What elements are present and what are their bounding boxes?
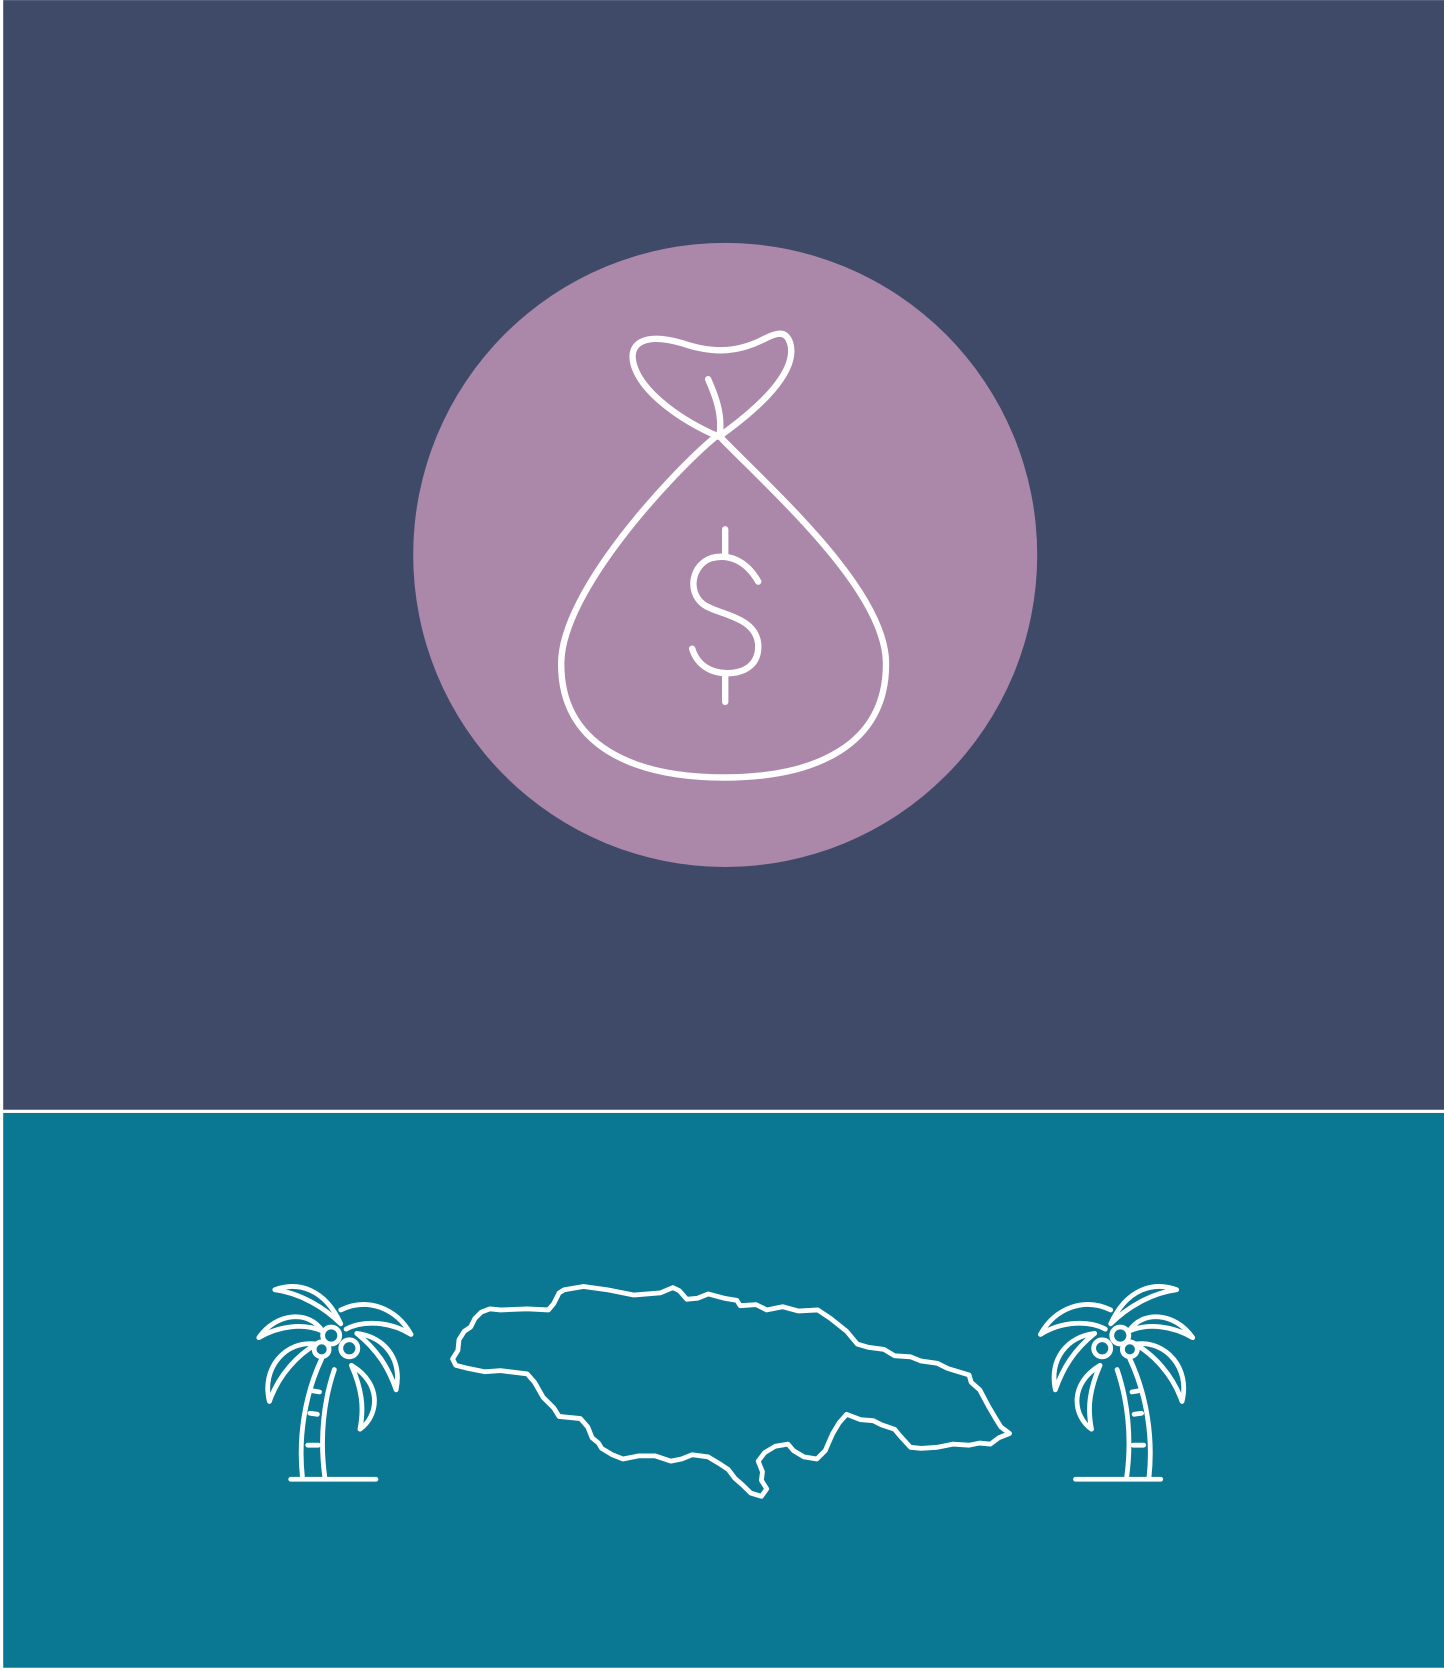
icon: money bag (561, 334, 886, 777)
panel: top money section (3, 0, 1444, 1110)
icon: left palm tree (259, 1286, 411, 1479)
icon: right palm tree (1040, 1286, 1193, 1479)
icon: purple circle (413, 243, 1037, 867)
panel: bottom Jamaica section (3, 1113, 1444, 1668)
icon: Jamaica outline (453, 1287, 1010, 1496)
